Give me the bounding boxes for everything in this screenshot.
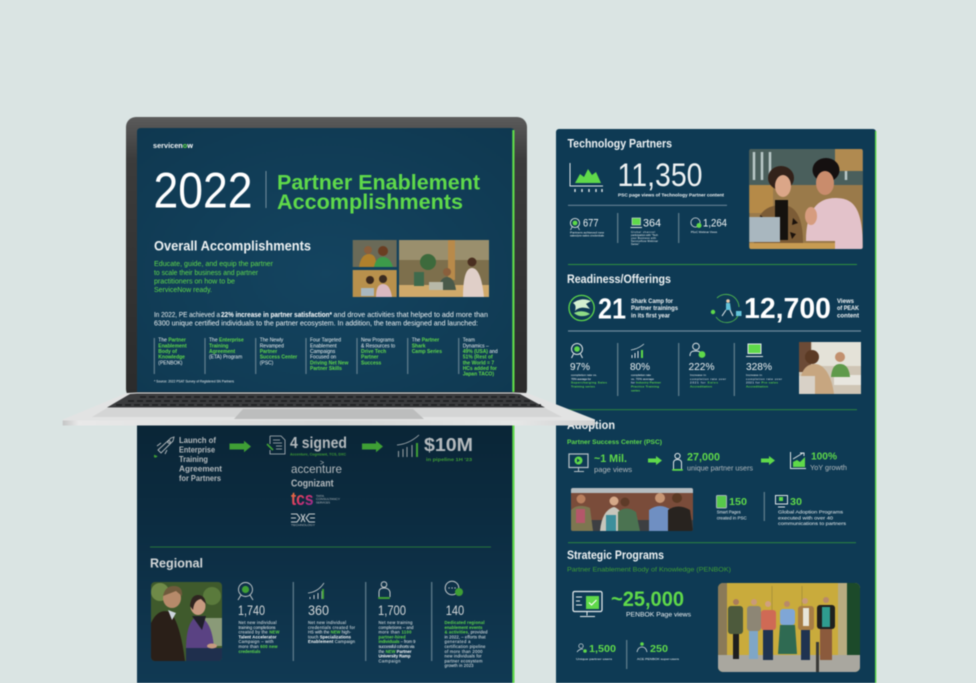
stat: 97%: 97% bbox=[570, 361, 590, 373]
item: drive tech: & Resources to bbox=[361, 343, 395, 349]
stat: 1,500 users bbox=[576, 643, 616, 661]
stat: 328%: Accreditation bbox=[746, 385, 768, 389]
stat: 677 bbox=[570, 218, 605, 237]
item: ETA: Agreement bbox=[209, 349, 235, 355]
stat: 140: in 2022, – efforts that bbox=[444, 634, 486, 639]
stat: 1,700 bbox=[378, 582, 416, 663]
stat: YoY growth bbox=[790, 451, 847, 472]
stat: page views: ~25,000 bbox=[611, 588, 684, 611]
stat: 140: growth in 2023 bbox=[444, 663, 474, 668]
item: shark camp: Camp Series bbox=[412, 349, 442, 355]
item: PENBOK: Body of bbox=[158, 349, 177, 355]
stat: 140: partner ecosystem bbox=[444, 658, 483, 663]
text: mission statement: practitioners on how to be bbox=[154, 276, 235, 286]
stat: 360 bbox=[308, 583, 356, 644]
stat: global adoption programs: 30 bbox=[790, 497, 802, 508]
stat: 1,700: individuals – from 9 bbox=[378, 639, 416, 644]
text: launch: Launch of bbox=[179, 435, 216, 445]
title bbox=[154, 162, 480, 218]
stat: partner users: 27,000 bbox=[687, 452, 720, 464]
stat: 1,740: Talent Accelerator bbox=[238, 634, 277, 639]
heading: overall accomplishments: Overall Accomplishments bbox=[154, 238, 311, 254]
stat: page views: PENBOK Page views bbox=[626, 612, 692, 619]
stat: global adoption programs: executed with over 40 bbox=[778, 515, 834, 520]
heading: Readiness/Offerings bbox=[567, 274, 671, 286]
stat: 80%: vs. 70% average bbox=[631, 377, 654, 381]
stat: 222%: 222% bbox=[688, 361, 714, 373]
stat: 1,264 bbox=[691, 218, 727, 234]
stat: 1,700: the NEW Partner bbox=[378, 649, 412, 654]
laptop bbox=[63, 117, 595, 426]
item: PENBOK: (PENBOK) bbox=[158, 360, 183, 366]
stat: 1,740: credentials bbox=[238, 649, 261, 654]
stat: smart pages bbox=[716, 496, 747, 520]
stat: 1,700: 1,700 bbox=[378, 602, 406, 618]
stat: smart pages: 150 bbox=[729, 497, 747, 508]
stat: 328% bbox=[746, 344, 782, 389]
logo: accenture: accenture bbox=[291, 462, 342, 476]
text: mission statement bbox=[154, 259, 273, 294]
text: summary: 6300 unique certified individuals to the partner ecosystem. In addition, the team designed and launched: bbox=[154, 318, 478, 328]
stat: 12,700: 12,700 bbox=[744, 293, 831, 325]
stat: 21: 21 bbox=[598, 293, 626, 325]
logo: cognizant: Cognizant bbox=[291, 478, 334, 490]
arrow bbox=[230, 441, 251, 452]
heading: regional: Regional bbox=[150, 556, 203, 571]
stat: 1,700: completions – and bbox=[378, 625, 414, 630]
title: Accomplishments bbox=[277, 191, 463, 214]
item: drive tech: New Programs bbox=[361, 338, 395, 344]
stat: $10M bbox=[424, 435, 473, 462]
stat: $10M: $10M bbox=[424, 435, 473, 455]
item: ETA: (ETA) Program bbox=[209, 355, 242, 361]
stat: 80%: series bbox=[631, 388, 640, 392]
section: strategic programs bbox=[567, 550, 860, 672]
stat: 328%: completion rate over bbox=[746, 377, 782, 381]
photo: two colleagues at laptop bbox=[749, 149, 863, 249]
stat: 1,264: PSoC Webinar Views bbox=[691, 230, 718, 234]
logo: tcs: TATA bbox=[316, 494, 324, 498]
item: shark camp bbox=[412, 338, 442, 355]
icon: growth chart bbox=[397, 435, 419, 457]
item: campaigns: Partner Skills bbox=[310, 366, 342, 372]
photos: collage bbox=[353, 240, 489, 297]
photo: group of friends bbox=[571, 488, 693, 531]
item: ETA bbox=[209, 338, 244, 361]
stat: 1,740: more than 600 new bbox=[238, 644, 278, 649]
item: team dynamics: Japan TACO) bbox=[463, 372, 494, 378]
stat: 250 super-users: ACE PENBOK super-users bbox=[637, 657, 680, 661]
stat: 222% bbox=[688, 343, 726, 389]
stat: 97%: Training series bbox=[571, 385, 595, 389]
item: campaigns bbox=[310, 338, 348, 372]
stat: $10M: in pipeline 1H '23 bbox=[426, 457, 473, 462]
stat: YoY growth: 100% bbox=[811, 451, 837, 462]
stat: 140: enablement events bbox=[444, 625, 483, 630]
panel: laptop screen bbox=[137, 128, 514, 392]
stat: 1,700: Campaign bbox=[378, 658, 401, 663]
stat: 328%: 328% bbox=[746, 361, 772, 373]
stat: 328%: 2021 for Pre-sales bbox=[746, 381, 778, 385]
stat: 364: Global channel bbox=[631, 230, 655, 234]
stat: page views: ~1 Mil. bbox=[594, 453, 627, 465]
stat: 80%: completion rate bbox=[631, 373, 651, 377]
stat: partner users: unique partner users bbox=[687, 464, 753, 473]
stat: page views bbox=[569, 453, 632, 474]
stat: 80% bbox=[630, 344, 662, 392]
stat: 97%: 70% average for bbox=[571, 377, 591, 381]
logo: tcs bbox=[291, 489, 340, 509]
stat: 140: Dedicated regional bbox=[444, 620, 484, 625]
logo: dxc: TECHNOLOGY bbox=[291, 523, 315, 527]
photo: two people outdoors bbox=[151, 582, 222, 661]
icon: rocket bbox=[155, 437, 174, 457]
subheading: Partner Success Center (PSC) bbox=[567, 439, 662, 446]
logo: tcs: tcs bbox=[291, 489, 314, 509]
stat: 1,740 bbox=[238, 582, 280, 654]
stat: 677: 677 bbox=[583, 218, 598, 230]
stat: 97% bbox=[570, 344, 607, 389]
stat: page views: PSC page views of Technology Partner content bbox=[618, 193, 724, 198]
stat: 360: credentials created for bbox=[308, 625, 356, 630]
stat: 360: Enablement Campaign bbox=[308, 639, 356, 644]
section: technology partners bbox=[568, 139, 863, 249]
stat: 140: & activities, provided bbox=[444, 630, 488, 635]
stat: 1,700: more than 1100 bbox=[378, 630, 412, 635]
item: drive tech: Success bbox=[361, 360, 382, 366]
section: adoption bbox=[567, 420, 847, 531]
text: mission statement: ServiceNow ready. bbox=[154, 285, 212, 294]
item: drive tech: Drive Tech bbox=[361, 349, 386, 355]
icon: peak figure bbox=[711, 294, 742, 323]
stat: 97%: Supercharging Sales bbox=[571, 381, 607, 385]
text: summary bbox=[154, 310, 488, 328]
photo: six people against yellow wall bbox=[718, 583, 860, 672]
stat: 80%: for Industry Partner bbox=[631, 381, 662, 385]
item: PENBOK: Enablement bbox=[158, 343, 187, 349]
stat: 1,740: created by the NEW bbox=[238, 630, 280, 635]
stat: 140: new individuals for bbox=[444, 654, 482, 659]
stat: 21 bbox=[598, 293, 678, 325]
item: PSC: Success Center bbox=[260, 355, 297, 361]
stat: 1,700: partner-hired bbox=[378, 634, 406, 639]
photo: office meeting bbox=[799, 342, 861, 394]
stat: 140: generated a bbox=[444, 639, 471, 644]
stat: 21: Partner trainings bbox=[631, 305, 678, 312]
stat: 250 super-users bbox=[637, 642, 680, 661]
logo: servicenow: servicenow bbox=[153, 141, 193, 150]
item: PENBOK bbox=[158, 338, 187, 366]
stat: 1,500 users: 1,500 bbox=[589, 643, 616, 655]
stat: 360: 360 bbox=[308, 602, 329, 618]
laptop lid bbox=[126, 117, 527, 399]
stat: 1,740: 1,740 bbox=[238, 602, 265, 618]
stat: 21: Shark Camp for bbox=[631, 298, 673, 305]
item: campaigns: Driving Net New bbox=[310, 360, 348, 366]
stat: 97%: completion rate vs. bbox=[571, 373, 597, 377]
stat: 4 signed: 4 signed bbox=[290, 435, 347, 452]
item: PSC: Partner bbox=[260, 349, 277, 355]
stat: partner users bbox=[672, 452, 753, 473]
stat: 1,700: Net new training bbox=[378, 620, 413, 625]
stat: YoY growth: YoY growth bbox=[810, 463, 847, 472]
item: PSC: (PSC) bbox=[260, 360, 274, 366]
stat: 140: of more than 2000 bbox=[444, 649, 483, 654]
item: drive tech bbox=[361, 338, 395, 366]
stat: 1,740: training completions bbox=[238, 625, 276, 630]
item: campaigns: Enablement bbox=[310, 343, 337, 349]
stat: 250 super-users: 250 bbox=[650, 643, 668, 655]
heading: Strategic Programs bbox=[567, 550, 664, 562]
stat: 364 bbox=[630, 218, 661, 246]
text: summary: and drove activities that helped to add more than bbox=[334, 310, 488, 319]
text: launch: Training bbox=[179, 454, 208, 464]
item: PENBOK: The Partner bbox=[158, 338, 186, 344]
item: team dynamics: the World = 7 bbox=[463, 360, 494, 366]
list: programs launched bbox=[154, 338, 498, 378]
stat: 4 signed: Accenture, Cognizant, TCS, DXC bbox=[290, 453, 346, 457]
stat: 12,700: of PEAK bbox=[837, 305, 859, 312]
stat: 364: ServiceNow Webinar bbox=[631, 239, 658, 243]
footnote: * Source: 2022 PSAT Survey of Registered SN Partners bbox=[154, 380, 234, 384]
arrow bbox=[648, 456, 662, 465]
stat: 1,500 users: Unique partner users bbox=[576, 657, 613, 661]
stat: 364: your Business with bbox=[631, 236, 657, 240]
item: team dynamics: 51% (Rest of bbox=[463, 355, 493, 361]
laptop base bbox=[63, 392, 595, 426]
stat: smart pages: Smart Pages bbox=[717, 510, 741, 515]
item: campaigns: Four Targeted bbox=[310, 338, 341, 344]
stat: 222%: Accreditation bbox=[690, 385, 712, 389]
stat: 1,700: successful cohorts via bbox=[378, 644, 415, 649]
item: drive tech: Partner bbox=[361, 355, 379, 361]
item: PSC bbox=[260, 338, 297, 366]
stat: 360: HS with the NEW high- bbox=[308, 630, 352, 635]
stat: 222%: completion rate over bbox=[690, 377, 726, 381]
item: campaigns: Focused on bbox=[310, 355, 336, 361]
stat: 1,700: University Ramp bbox=[378, 654, 411, 659]
item: team dynamics: 49% (USA) and bbox=[463, 349, 498, 355]
stat: global adoption programs: communications to partners bbox=[778, 521, 847, 526]
logo: tcs: SERVICES bbox=[316, 500, 330, 504]
item: team dynamics: HCs added for bbox=[463, 366, 497, 372]
arrow bbox=[362, 441, 383, 452]
item: team dynamics bbox=[463, 338, 498, 378]
stat: 222%: 2021 for Sales bbox=[690, 381, 718, 385]
logos bbox=[291, 460, 342, 527]
stat: global adoption programs: Global Adoption Programs bbox=[778, 510, 844, 515]
item: PSC: The Newly bbox=[260, 338, 284, 344]
logo: tcs: CONSULTANCY bbox=[316, 497, 340, 501]
item: team dynamics: Team bbox=[463, 338, 475, 344]
item: PSC: Revamped bbox=[260, 343, 284, 349]
stat: 360: touch Specializations bbox=[308, 634, 352, 639]
text: mission statement: to scale their business and partner bbox=[154, 268, 258, 277]
text: launch: for Partners bbox=[179, 473, 221, 483]
item: ETA: The Enterprise bbox=[209, 338, 244, 344]
stat: 140: 140 bbox=[446, 602, 464, 618]
title: 2022 bbox=[154, 162, 252, 218]
arrow bbox=[761, 456, 775, 465]
icon: monitor with check bbox=[573, 592, 602, 616]
panel: right document bbox=[556, 129, 876, 683]
icon: signed document bbox=[267, 436, 285, 454]
stat: 360: Net new individual bbox=[308, 620, 346, 625]
stat: global adoption programs bbox=[776, 496, 847, 526]
stat: 364: 364 bbox=[643, 218, 661, 230]
stat: 364: participation with "Tech bbox=[631, 233, 659, 237]
panel: lower left document bbox=[137, 420, 514, 683]
text: launch: Agreement bbox=[179, 464, 222, 474]
heading: Adoption bbox=[567, 420, 615, 432]
stat: 1,264: 1,264 bbox=[703, 218, 727, 230]
heading: Technology Partners bbox=[568, 139, 672, 151]
text: summary: 22% increase in partner satisfaction* bbox=[221, 310, 332, 319]
stat: 1,740: Net new individual bbox=[238, 620, 277, 625]
item: ETA: Training bbox=[209, 343, 228, 349]
stat: 140: certification pipeline bbox=[444, 644, 486, 649]
logo: accenture: > bbox=[320, 460, 324, 467]
item: team dynamics: Dynamics – bbox=[463, 343, 489, 349]
text: launch: Enterprise bbox=[179, 444, 215, 454]
item: shark camp: The Partner bbox=[412, 338, 439, 344]
stat: 21: in its first year bbox=[631, 312, 670, 319]
text: launch bbox=[179, 435, 222, 483]
stat: 12,700: Views bbox=[837, 298, 854, 305]
stat: 12,700: content bbox=[837, 312, 860, 319]
stat: 328%: Increase in bbox=[746, 373, 762, 377]
item: PENBOK: Knowledge bbox=[158, 355, 185, 361]
item: campaigns: Campaigns bbox=[310, 349, 336, 355]
section: readiness/offerings bbox=[567, 274, 861, 396]
stat: 140 bbox=[444, 581, 488, 668]
stat: 677: Partners achieved new bbox=[570, 230, 605, 234]
stat: smart pages: created in PSC bbox=[717, 515, 747, 520]
text: summary: In 2022, PE achieved a bbox=[154, 310, 221, 319]
text: mission statement: Educate, guide, and equip the partner bbox=[154, 259, 273, 268]
title: Partner Enablement bbox=[277, 172, 480, 194]
stat: 80%: 80% bbox=[630, 361, 650, 373]
stat: 222%: Increase in bbox=[690, 373, 706, 377]
subheading: Partner Enablement Body of Knowledge (PENBOK) bbox=[567, 567, 731, 574]
stat: 364: Series" bbox=[631, 242, 639, 246]
stat: page views: page views bbox=[594, 465, 632, 474]
stat: 1,740: Campaign – with bbox=[238, 639, 274, 644]
stat: page views: 11,350 bbox=[618, 157, 702, 193]
icon: shark camp badge bbox=[569, 295, 594, 321]
item: shark camp: Shark bbox=[412, 343, 426, 349]
stat: 80%: Practice Training bbox=[631, 385, 659, 389]
icon: area chart bbox=[570, 163, 603, 192]
stat: 677: sales/pre-sales credentials bbox=[570, 233, 605, 237]
